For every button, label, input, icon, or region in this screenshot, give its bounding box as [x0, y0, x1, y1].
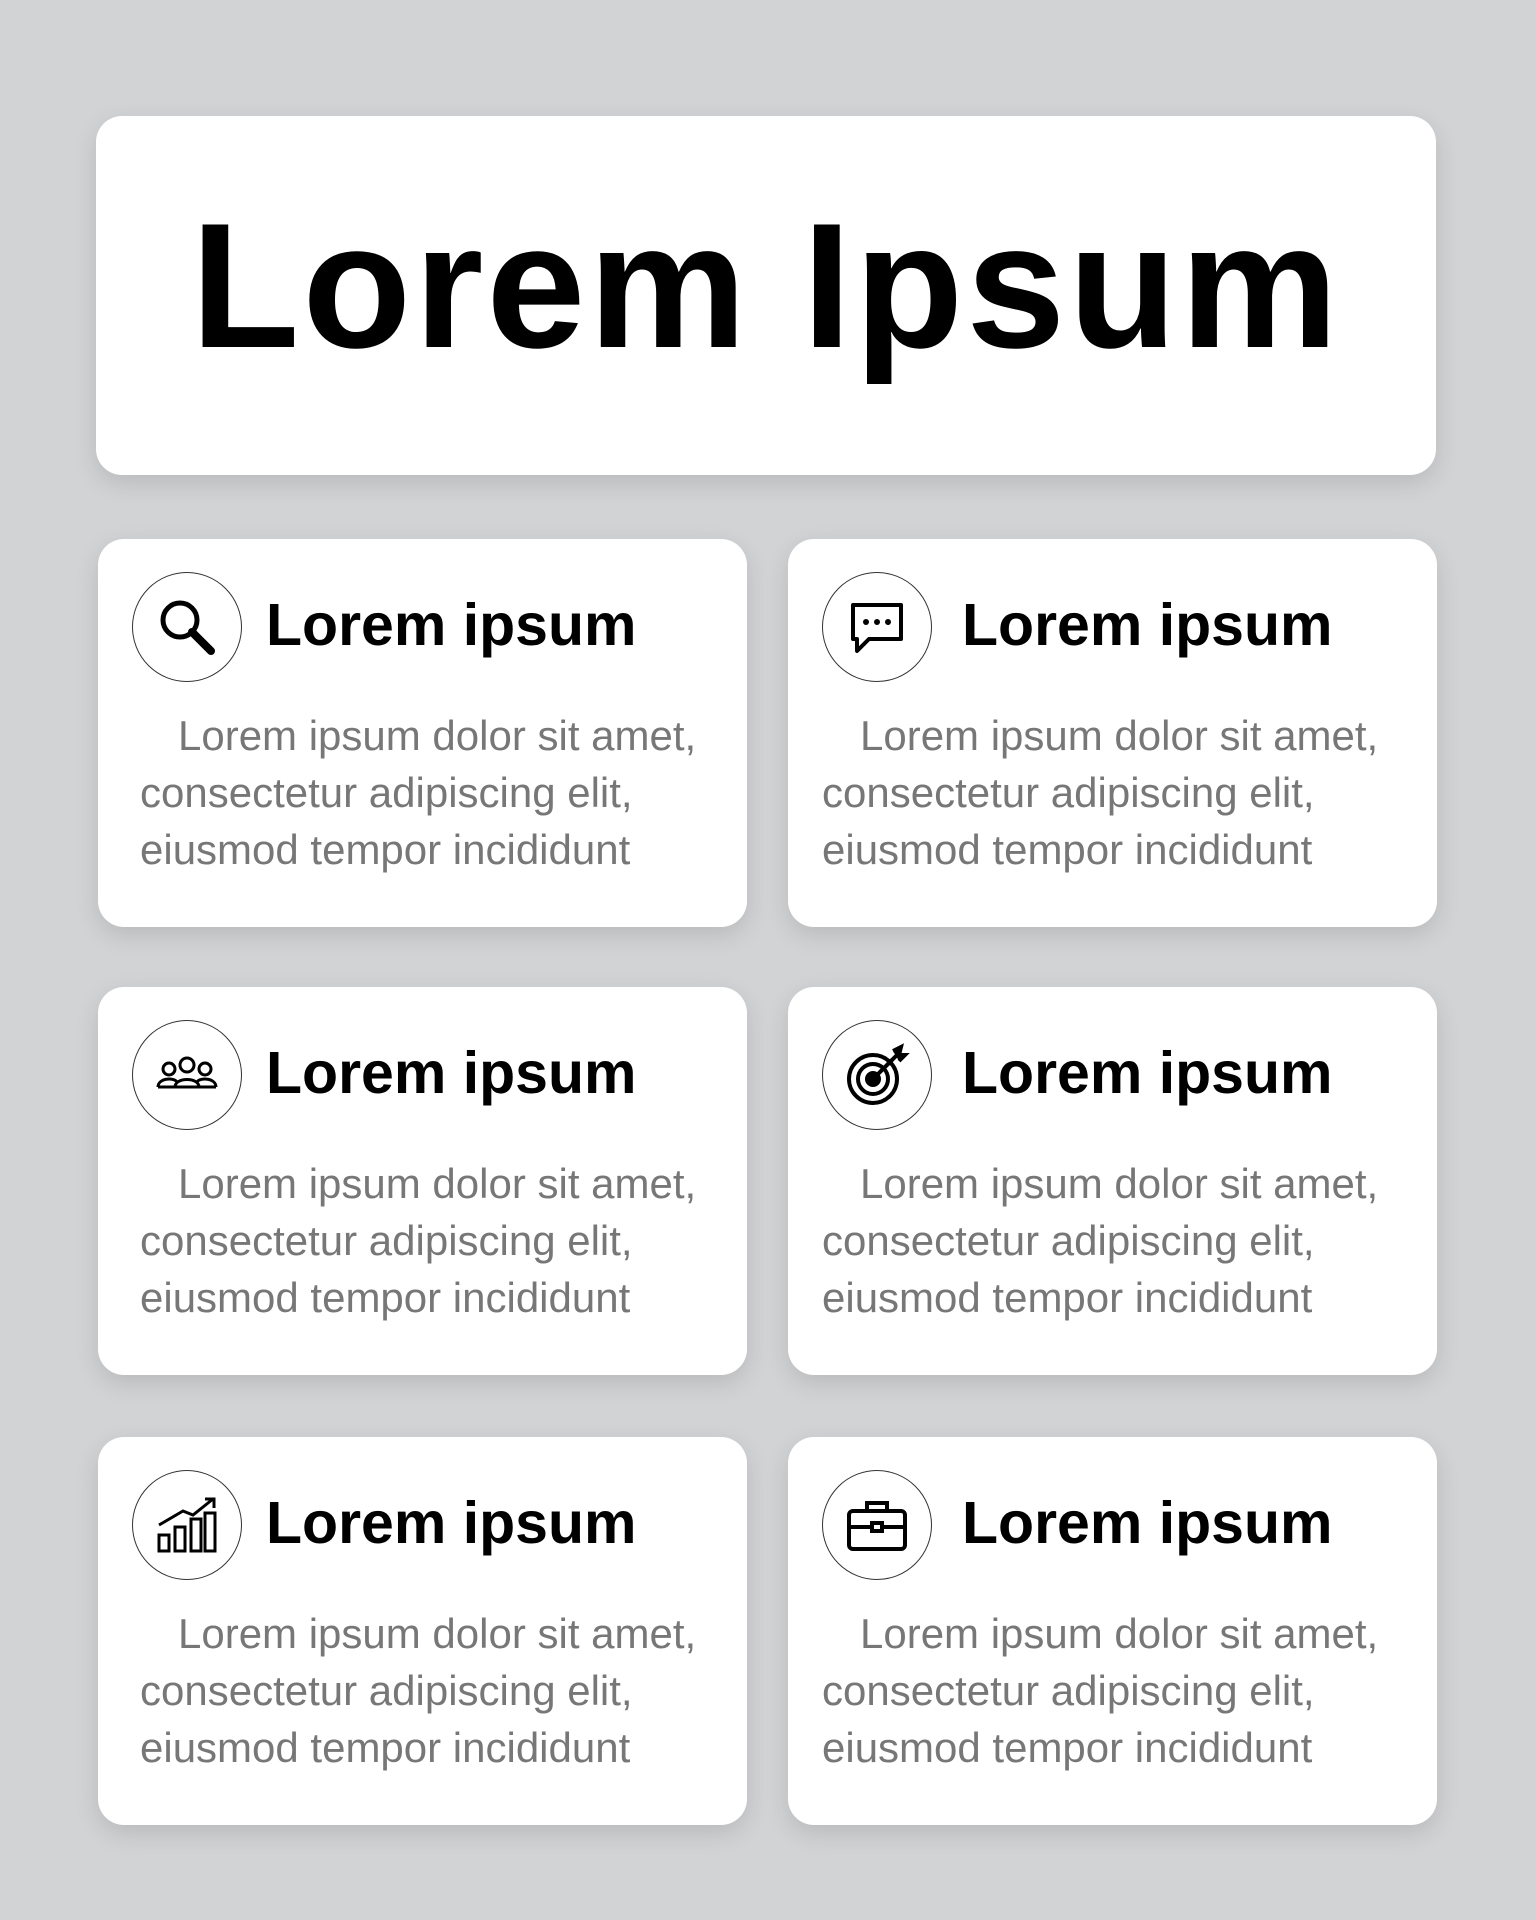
- text: [822, 712, 1378, 873]
- icon: magnifier: [132, 572, 242, 682]
- text: consectetur adipiscing elit,: [822, 769, 1315, 816]
- text: consectetur adipiscing elit,: [822, 1667, 1315, 1714]
- text: eiusmod tempor incididunt: [140, 1724, 630, 1771]
- text: [822, 1610, 1378, 1771]
- title card: [96, 116, 1436, 475]
- text: eiusmod tempor incididunt: [140, 1274, 630, 1321]
- panel: team: [98, 987, 747, 1375]
- text: Lorem ipsum dolor sit amet,: [178, 1610, 696, 1657]
- icon: speech bubble: [822, 572, 932, 682]
- text: Lorem ipsum dolor sit amet,: [178, 1160, 696, 1207]
- text: [822, 1160, 1378, 1321]
- text: [140, 1610, 696, 1771]
- panel: briefcase: [788, 1437, 1437, 1825]
- text: [140, 712, 696, 873]
- heading: Lorem ipsum: [962, 592, 1332, 658]
- text: eiusmod tempor incididunt: [140, 826, 630, 873]
- panel: search: [98, 539, 747, 927]
- text: Lorem ipsum dolor sit amet,: [860, 712, 1378, 759]
- heading: Lorem ipsum: [266, 592, 636, 658]
- text: consectetur adipiscing elit,: [140, 1217, 633, 1264]
- text: consectetur adipiscing elit,: [822, 1217, 1315, 1264]
- heading: Lorem ipsum: [266, 1490, 636, 1556]
- title card: Lorem Ipsum: [191, 186, 1341, 385]
- heading: Lorem ipsum: [962, 1490, 1332, 1556]
- text: Lorem ipsum dolor sit amet,: [860, 1160, 1378, 1207]
- text: consectetur adipiscing elit,: [140, 1667, 633, 1714]
- icon: target: [822, 1020, 932, 1130]
- panel: chat: [788, 539, 1437, 927]
- text: eiusmod tempor incididunt: [822, 1274, 1312, 1321]
- text: [140, 1160, 696, 1321]
- icon: briefcase: [822, 1470, 932, 1580]
- text: eiusmod tempor incididunt: [822, 826, 1312, 873]
- text: Lorem ipsum dolor sit amet,: [860, 1610, 1378, 1657]
- panel: target: [788, 987, 1437, 1375]
- panel: growth: [98, 1437, 747, 1825]
- heading: Lorem ipsum: [266, 1040, 636, 1106]
- text: Lorem ipsum dolor sit amet,: [178, 712, 696, 759]
- icon: people: [132, 1020, 242, 1130]
- text: eiusmod tempor incididunt: [822, 1724, 1312, 1771]
- icon: bar chart: [132, 1470, 242, 1580]
- heading: Lorem ipsum: [962, 1040, 1332, 1106]
- text: consectetur adipiscing elit,: [140, 769, 633, 816]
